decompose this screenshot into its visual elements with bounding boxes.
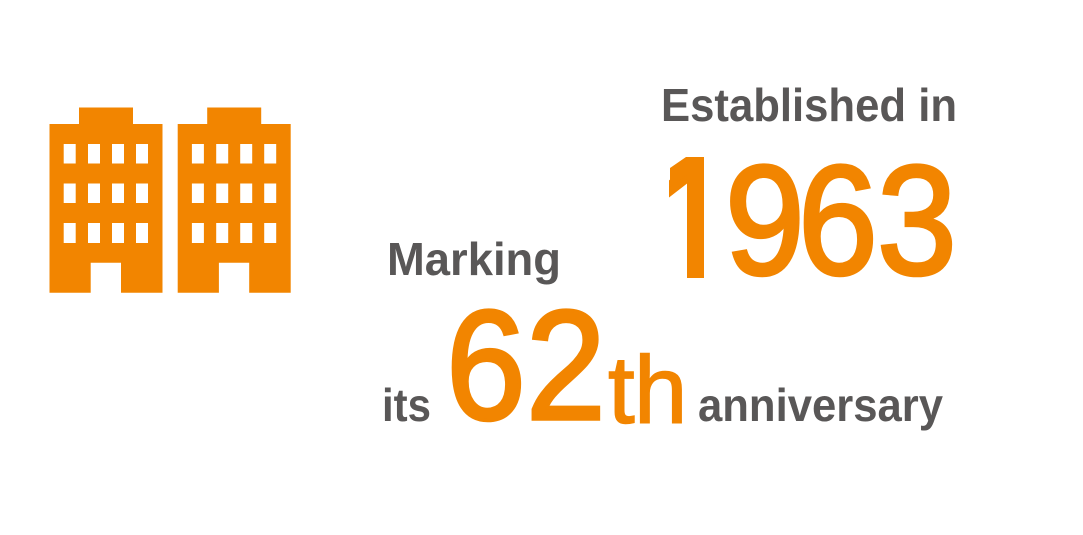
big year: 1963: 1963 [653,132,957,307]
ordinal suffix: th: th [608,337,687,444]
big year: 1963 [669,157,952,278]
text: Marking: Marking [387,233,561,285]
big number: 62: 62 [446,277,606,452]
text: anniversary: anniversary [698,379,943,431]
heading: Established in: Established in [661,79,957,131]
icon: two office buildings [50,108,291,293]
icon: left building [50,108,162,293]
text: its: its [382,379,431,431]
icon: right building [178,108,291,293]
